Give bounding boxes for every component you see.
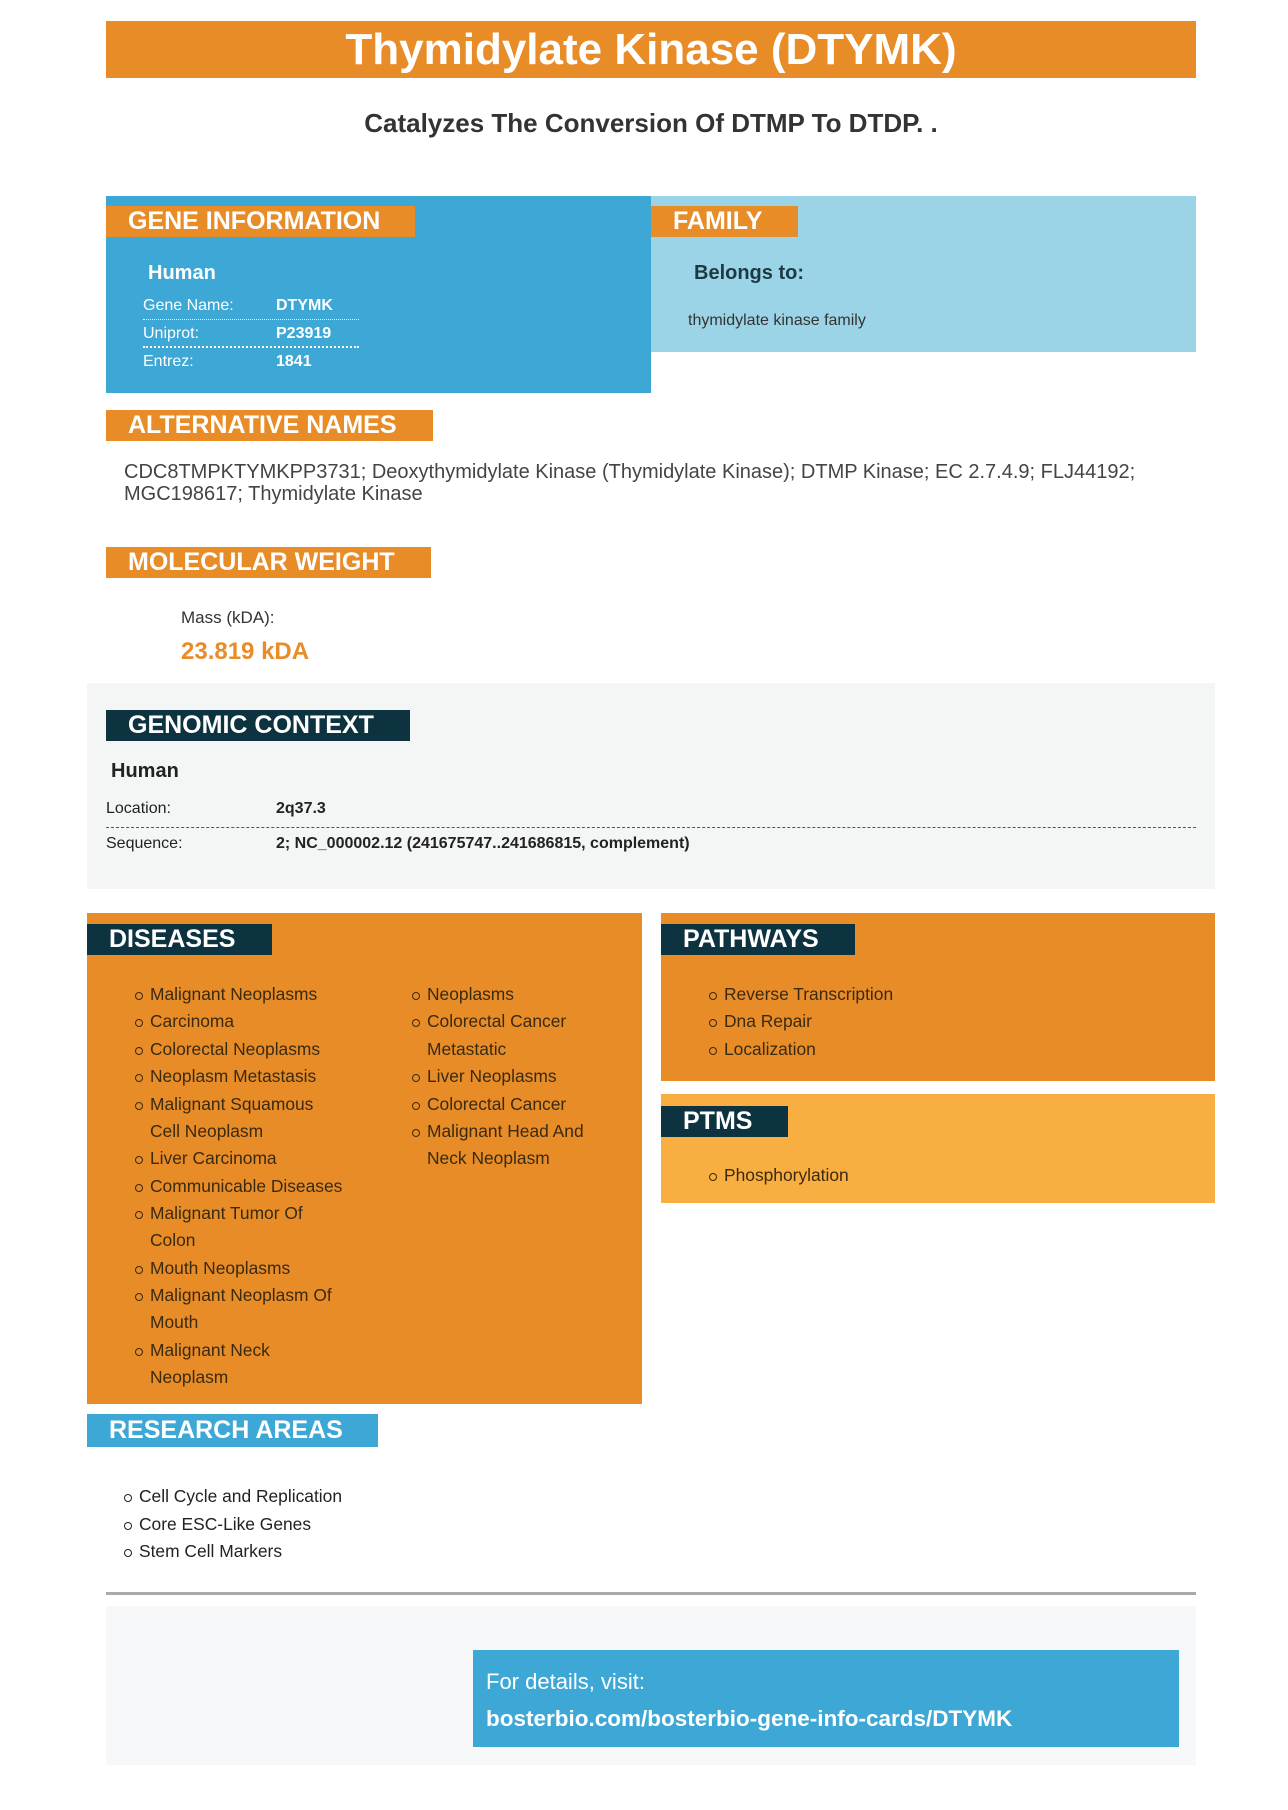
location/sequence: Location: — [106, 800, 171, 817]
panel: diseases: Neoplasm Metastasis — [150, 1066, 316, 1086]
gene rows — [143, 297, 359, 370]
species: Human — [111, 760, 179, 782]
heading: pathways — [661, 924, 855, 955]
panel: diseases: Colorectal Neoplasms — [150, 1039, 320, 1059]
panel: diseases: Mouth — [150, 1312, 198, 1332]
panel: family — [651, 196, 1196, 352]
mass: 23.819 kDA — [181, 638, 309, 665]
title — [106, 21, 1196, 78]
pathway list — [709, 984, 893, 1059]
location/sequence: Sequence: — [106, 835, 183, 852]
panel: pathways: Localization — [724, 1039, 816, 1059]
panel: diseases: Malignant Tumor Of — [150, 1203, 303, 1223]
panel: diseases: Liver Carcinoma — [150, 1148, 277, 1168]
panel: ptms: Phosphorylation — [724, 1165, 849, 1185]
heading: genomic context: GENOMIC CONTEXT — [128, 711, 374, 739]
callout: details link: bosterbio.com/bosterbio-gene-info-cards/DTYMK — [486, 1706, 1012, 1731]
heading: alternative names: ALTERNATIVE NAMES — [128, 411, 397, 439]
heading: research areas: RESEARCH AREAS — [109, 1416, 343, 1444]
heading: diseases: DISEASES — [109, 925, 235, 953]
panel: diseases: Carcinoma — [150, 1011, 234, 1031]
panel: gene information — [106, 196, 651, 393]
mass — [181, 608, 309, 665]
panel: genomic context — [87, 683, 1215, 889]
mass: Mass (kDA): — [181, 608, 274, 627]
panel: pathways: Dna Repair — [724, 1011, 812, 1031]
disease list col 2 — [412, 984, 584, 1168]
panel: diseases: Malignant Head And — [427, 1121, 584, 1141]
panel: diseases: Neoplasms — [427, 984, 514, 1004]
text: Stem Cell Markers — [139, 1541, 282, 1561]
panel: pathways: Reverse Transcription — [724, 984, 893, 1004]
panel: diseases: Mouth Neoplasms — [150, 1258, 290, 1278]
heading: ptms — [661, 1106, 788, 1137]
gene rows: 1841 — [276, 353, 312, 370]
belongs to: Belongs to: — [694, 262, 804, 284]
panel: pathways — [661, 913, 1215, 1081]
heading: gene information: GENE INFORMATION — [128, 207, 380, 235]
research list — [124, 1486, 342, 1561]
heading: family: FAMILY — [673, 207, 762, 235]
location/sequence: 2q37.3 — [276, 800, 326, 817]
heading: pathways: PATHWAYS — [683, 925, 819, 953]
panel: ptms — [661, 1094, 1215, 1203]
panel: diseases: Malignant Neck — [150, 1340, 270, 1360]
panel: diseases: Malignant Neoplasm Of — [150, 1285, 332, 1305]
gene rows: Uniprot: — [143, 325, 199, 342]
heading: research areas — [87, 1414, 378, 1447]
heading: molecular weight: MOLECULAR WEIGHT — [128, 548, 395, 576]
footer panel — [106, 1606, 1196, 1765]
title: Thymidylate Kinase (DTYMK) — [345, 25, 957, 74]
heading: family — [651, 206, 798, 237]
panel: diseases: Malignant Neoplasms — [150, 984, 317, 1004]
gene rows: Entrez: — [143, 353, 194, 370]
alternative names text: CDC8TMPKTYMKPP3731; Deoxythymidylate Kinase (Thymidylate Kinase); DTMP Kinase; EC 2.7.4.9; FLJ44192; MGC198617; Thymidylate Kinase — [124, 461, 1135, 505]
panel: diseases: Liver Neoplasms — [427, 1066, 557, 1086]
panel: diseases: Communicable Diseases — [150, 1176, 342, 1196]
panel: diseases: Colon — [150, 1230, 195, 1250]
panel: diseases — [87, 913, 642, 1404]
family text: thymidylate kinase family — [688, 312, 866, 329]
subtitle: Catalyzes The Conversion Of DTMP To DTDP. . — [364, 108, 938, 138]
location/sequence — [106, 800, 1196, 852]
panel: diseases: Neoplasm — [150, 1367, 228, 1387]
disease list col 1 — [135, 984, 342, 1387]
panel: diseases: Cell Neoplasm — [150, 1121, 263, 1141]
panel: diseases: Colorectal Cancer — [427, 1011, 566, 1031]
gene rows: DTYMK — [276, 297, 333, 314]
location/sequence: 2; NC_000002.12 (241675747..241686815, complement) — [276, 835, 690, 852]
gene rows: P23919 — [276, 325, 331, 342]
text: Core ESC-Like Genes — [139, 1514, 311, 1534]
heading: diseases — [87, 924, 272, 955]
panel: diseases: Colorectal Cancer — [427, 1094, 566, 1114]
panel: diseases: Metastatic — [427, 1039, 506, 1059]
callout: details link: For details, visit: — [486, 1669, 645, 1694]
panel: diseases: Malignant Squamous — [150, 1094, 313, 1114]
gene rows: Gene Name: — [143, 297, 234, 314]
species: Human — [148, 262, 216, 284]
panel: diseases: Neck Neoplasm — [427, 1148, 550, 1168]
callout: details link — [473, 1650, 1179, 1747]
heading: ptms: PTMS — [683, 1107, 752, 1135]
text: Cell Cycle and Replication — [139, 1486, 342, 1506]
